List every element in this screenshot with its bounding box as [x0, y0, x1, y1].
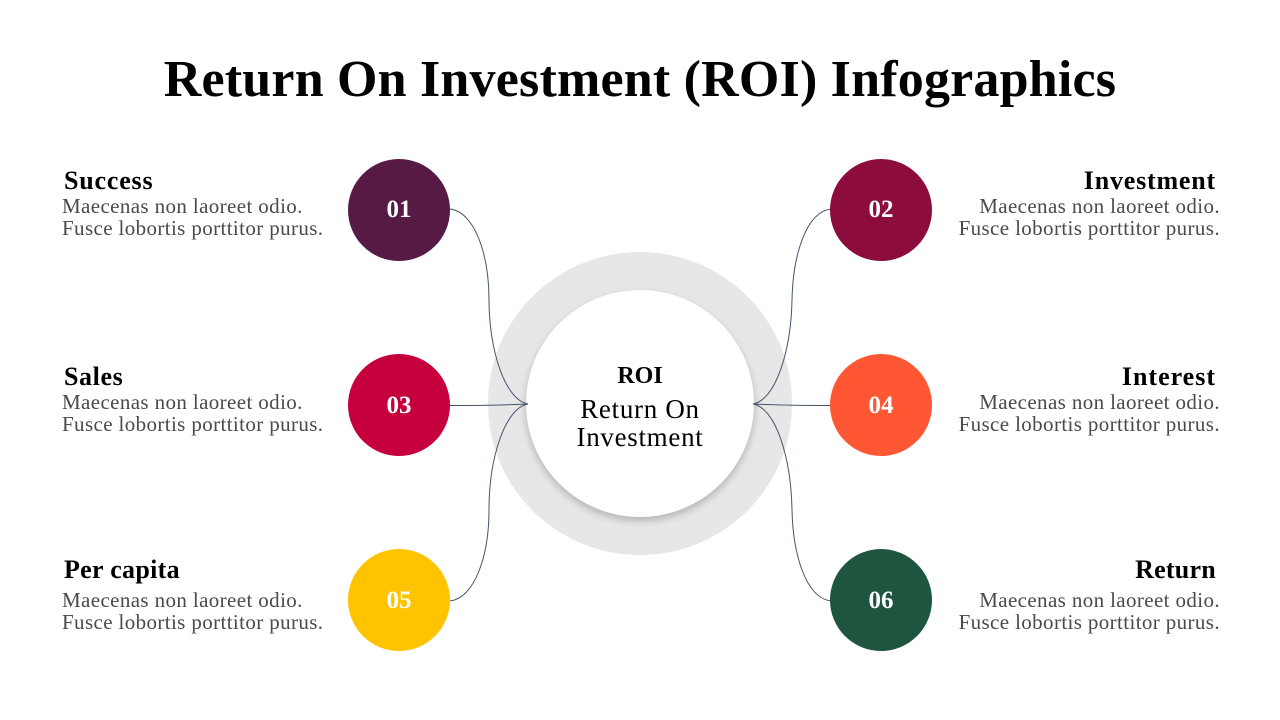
circle 03: 03 — [386, 392, 412, 419]
text: Success: Fusce lobortis porttitor purus. — [62, 216, 323, 240]
circle 01: 01 — [386, 196, 412, 223]
circle 03 — [348, 354, 450, 456]
text: Return: Maecenas non laoreet odio. — [979, 588, 1220, 612]
text: Interest: Maecenas non laoreet odio. — [979, 390, 1220, 414]
circle 04: 04 — [868, 392, 894, 419]
text: Investment — [959, 194, 1220, 240]
text: Interest: Fusce lobortis porttitor purus. — [959, 412, 1220, 436]
text: Per capita: Fusce lobortis porttitor purus. — [62, 610, 323, 634]
text: Interest — [959, 390, 1220, 436]
central label — [576, 363, 703, 452]
circle 02: 02 — [868, 196, 894, 223]
heading: Sales: Sales — [64, 362, 123, 391]
text: Per capita — [62, 588, 323, 634]
central ring — [488, 252, 792, 555]
text: Success: Maecenas non laoreet odio. — [62, 194, 303, 218]
heading: Success: Success — [64, 166, 153, 195]
text: Per capita: Maecenas non laoreet odio. — [62, 588, 303, 612]
text: Success — [62, 194, 323, 240]
text: Sales — [62, 390, 323, 436]
heading: Return: Return — [1135, 555, 1216, 584]
central circle — [526, 290, 754, 517]
circle 06 — [830, 549, 932, 651]
circle 02 — [830, 159, 932, 261]
circle 05: 05 — [386, 587, 412, 614]
text: Sales: Maecenas non laoreet odio. — [62, 390, 303, 414]
text: Investment: Fusce lobortis porttitor purus. — [959, 216, 1220, 240]
circle 04 — [830, 354, 932, 456]
text: Sales: Fusce lobortis porttitor purus. — [62, 412, 323, 436]
circle 05 — [348, 549, 450, 651]
text: Investment: Maecenas non laoreet odio. — [979, 194, 1220, 218]
title: Return On Investment (ROI) Infographics — [164, 51, 1116, 108]
heading: Per capita: Per capita — [64, 555, 180, 584]
circle 01 — [348, 159, 450, 261]
heading: Interest: Interest — [1122, 362, 1216, 391]
central label: Investment — [576, 422, 703, 452]
central label: ROI — [617, 363, 663, 389]
text: Return — [959, 588, 1220, 634]
circle 06: 06 — [868, 587, 894, 614]
heading: Investment: Investment — [1084, 166, 1216, 195]
central label: Return On — [580, 394, 700, 424]
text: Return: Fusce lobortis porttitor purus. — [959, 610, 1220, 634]
